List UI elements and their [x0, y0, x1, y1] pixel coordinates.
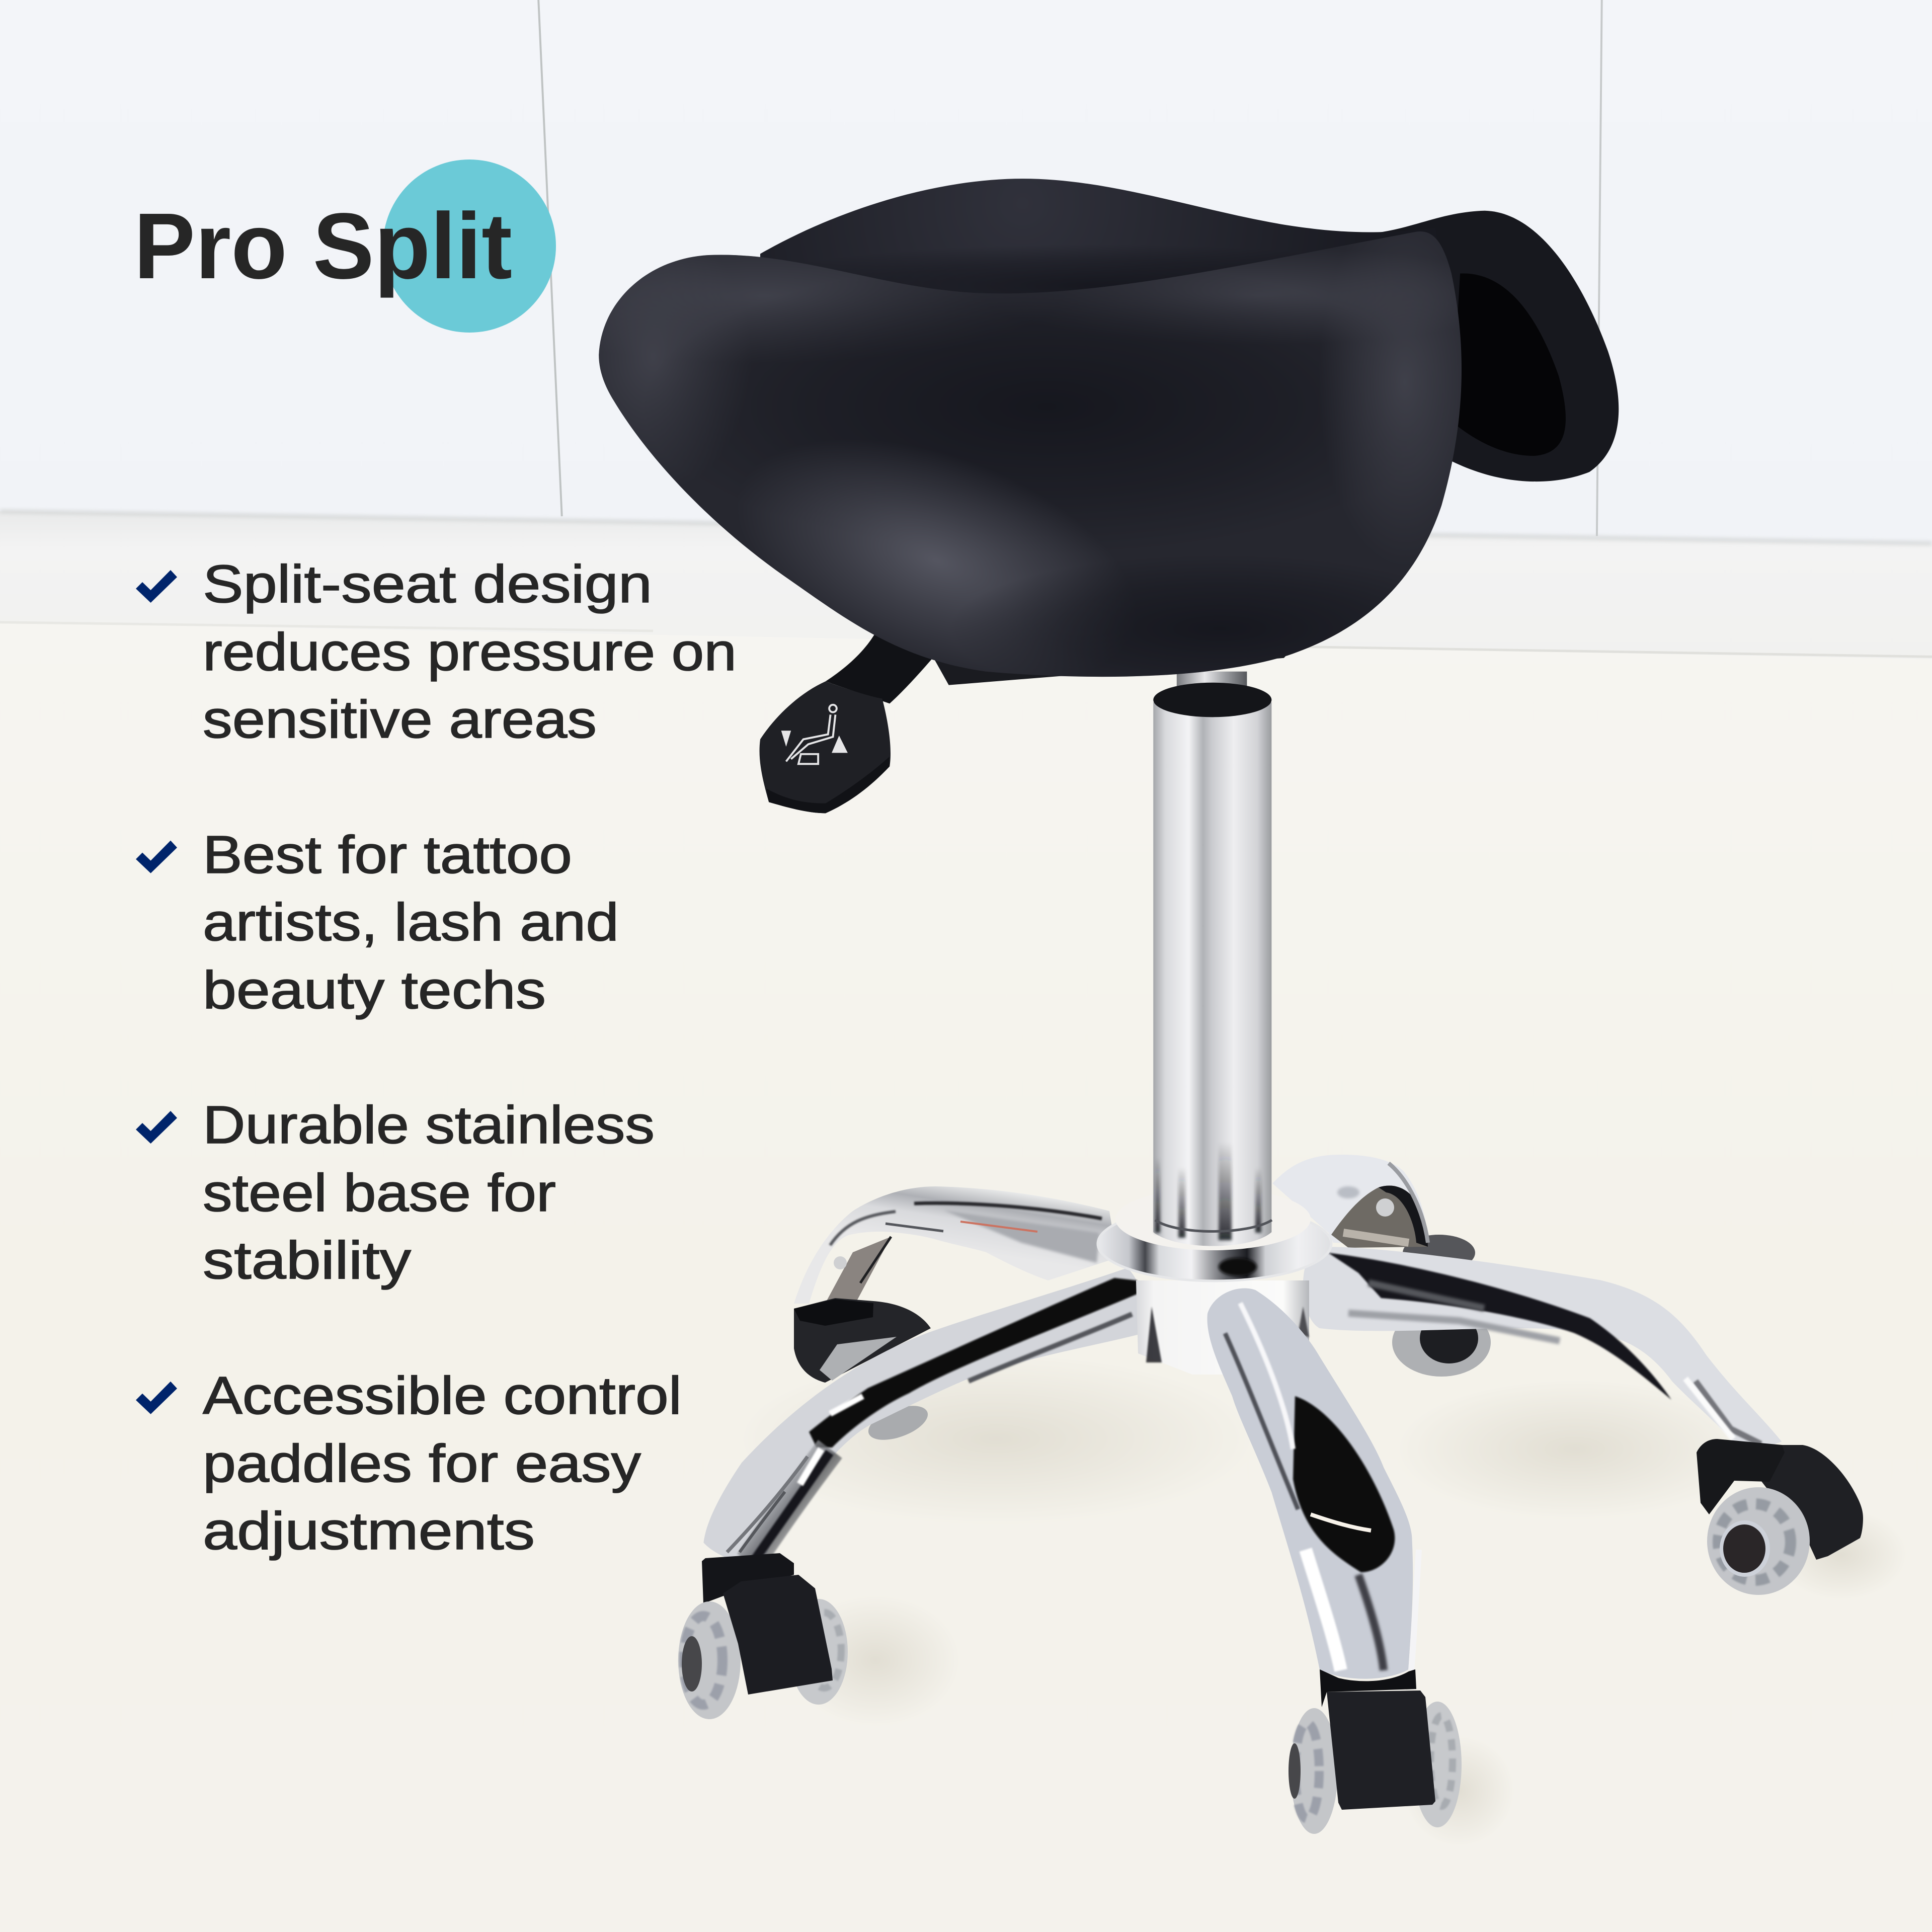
title: Pro Split — [134, 194, 512, 298]
feature 1: split-seat design — [136, 554, 737, 749]
base leg: back right — [1272, 1155, 1428, 1248]
floor shadows — [735, 1353, 1907, 1846]
stool illustration — [468, 179, 1907, 1846]
feature 1: split-seat design: sensitive areas — [203, 690, 597, 749]
feature 4: accessible control paddles: Accessible control — [203, 1366, 682, 1425]
back left fork — [825, 1237, 891, 1304]
caster: right — [1697, 1439, 1863, 1595]
seat: front cushion — [599, 231, 1462, 677]
hub collar — [1098, 1188, 1331, 1281]
base leg: back left — [794, 1186, 1117, 1304]
under-seat plate — [931, 627, 1312, 685]
icon: chair adjust symbol — [781, 705, 848, 764]
caster: front centre — [1289, 1669, 1462, 1834]
feature 3: durable steel base — [136, 1095, 655, 1290]
rear caster right — [1392, 1235, 1491, 1377]
central pole — [1153, 672, 1272, 1246]
control paddle — [760, 627, 933, 813]
feature 4: accessible control paddles: adjustments — [203, 1501, 535, 1561]
feature 4: accessible control paddles — [136, 1366, 682, 1561]
base block under hub — [1136, 1280, 1309, 1375]
feature 3: durable steel base: stability — [203, 1231, 411, 1290]
feature 1: split-seat design: Split-seat design — [203, 554, 652, 614]
accent circle — [383, 159, 556, 333]
base leg: right — [1303, 1247, 1782, 1455]
feature 2: best for tattoo artists: artists, lash and — [203, 893, 619, 952]
feature 3: durable steel base: steel base for — [203, 1163, 556, 1223]
base leg: front left — [703, 1268, 1145, 1567]
feature 1: split-seat design: reduces pressure on — [203, 622, 737, 682]
feature 3: durable steel base: Durable stainless — [203, 1095, 655, 1155]
feature list — [136, 554, 737, 1561]
feature 2: best for tattoo artists: Best for tattoo — [203, 825, 572, 884]
seat: rear flap and rear cushion — [739, 179, 1619, 481]
feature 2: best for tattoo artists — [136, 825, 619, 1020]
base leg: front centre — [1207, 1288, 1419, 1679]
feature 2: best for tattoo artists: beauty techs — [203, 960, 546, 1020]
rear caster left — [794, 1298, 932, 1447]
caster: front left — [678, 1553, 848, 1719]
feature 4: accessible control paddles: paddles for easy — [203, 1434, 641, 1493]
